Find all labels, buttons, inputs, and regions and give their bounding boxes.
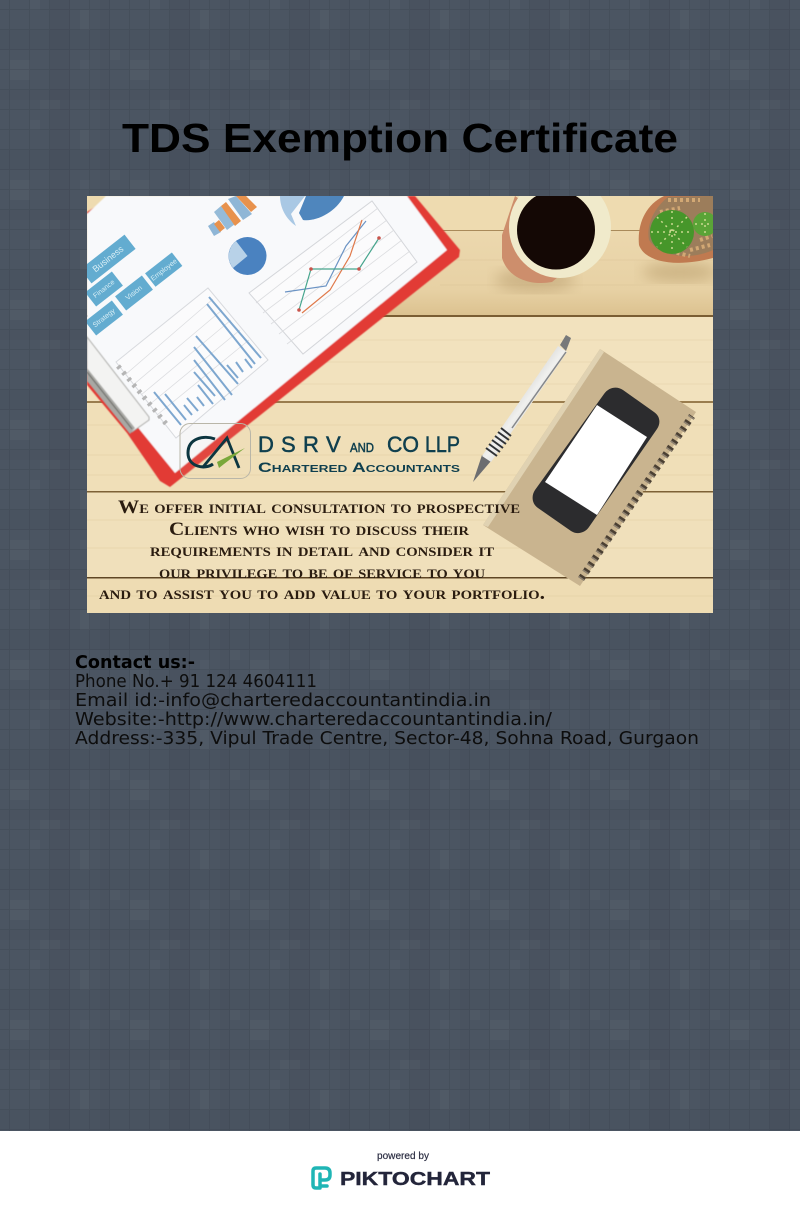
contact text block: Contact us:- — [75, 653, 195, 673]
bar chart on paper — [116, 288, 268, 438]
company name: V — [326, 432, 341, 457]
company name: AND — [350, 441, 374, 455]
contact text block: Email id:-info@charteredaccountantindia.in — [75, 691, 491, 711]
flow chart boxes: Strategy — [92, 307, 117, 329]
company name: LLP — [425, 432, 460, 457]
consultation message — [99, 497, 545, 604]
company name: Chartered Accountants — [258, 459, 460, 475]
notebook — [483, 349, 696, 586]
flow chart boxes: Vision — [125, 285, 144, 302]
contact text block: Phone No.+ 91 124 4604111 — [75, 672, 317, 692]
consultation message: Clients who wish to discuss their — [169, 519, 470, 540]
contact text block: Website:-http://www.charteredaccountantindia.in/ — [75, 710, 552, 730]
photo panel: desk with clipboard, coffee, phone and company message — [87, 196, 713, 613]
flow chart boxes: Employee — [150, 258, 179, 283]
red clipboard — [87, 196, 460, 487]
consultation message: our privilege to be of service to you — [159, 562, 486, 583]
company name — [258, 432, 460, 475]
cactus pot — [639, 196, 718, 282]
line chart — [249, 201, 417, 354]
company name: R — [303, 432, 319, 457]
contact text block — [75, 653, 699, 749]
company name: D — [258, 432, 274, 457]
powered by label: powered by — [377, 1150, 430, 1162]
title: TDS Exemption Certificate — [122, 115, 678, 161]
coffee cup — [495, 176, 611, 292]
flow chart boxes: Finance — [92, 279, 116, 300]
contact text block: Address:-335, Vipul Trade Centre, Sector-48, Sohna Road, Gurgaon — [75, 729, 699, 749]
consultation message: requirements in detail and consider it — [150, 540, 494, 561]
flow chart boxes — [80, 235, 182, 336]
paper clip plate — [87, 337, 149, 434]
footer: powered by Piktochart — [311, 1150, 491, 1190]
pen — [473, 335, 571, 482]
consultation message: We offer initial consultation to prospective — [118, 497, 520, 518]
small bar chart — [208, 196, 257, 236]
wood table — [87, 196, 713, 613]
consultation message: and to assist you to add value to your portfolio. — [99, 583, 545, 604]
notebook spiral binding — [581, 416, 692, 579]
icon: Piktochart logo — [313, 1168, 330, 1188]
logo badge — [180, 424, 250, 478]
company name: S — [281, 432, 296, 457]
company name: CO — [387, 432, 419, 457]
flow chart boxes: Business — [91, 244, 126, 274]
smartphone — [533, 388, 659, 533]
Piktochart wordmark: PIKTOCHART — [340, 1168, 491, 1189]
pie charts — [228, 196, 344, 275]
